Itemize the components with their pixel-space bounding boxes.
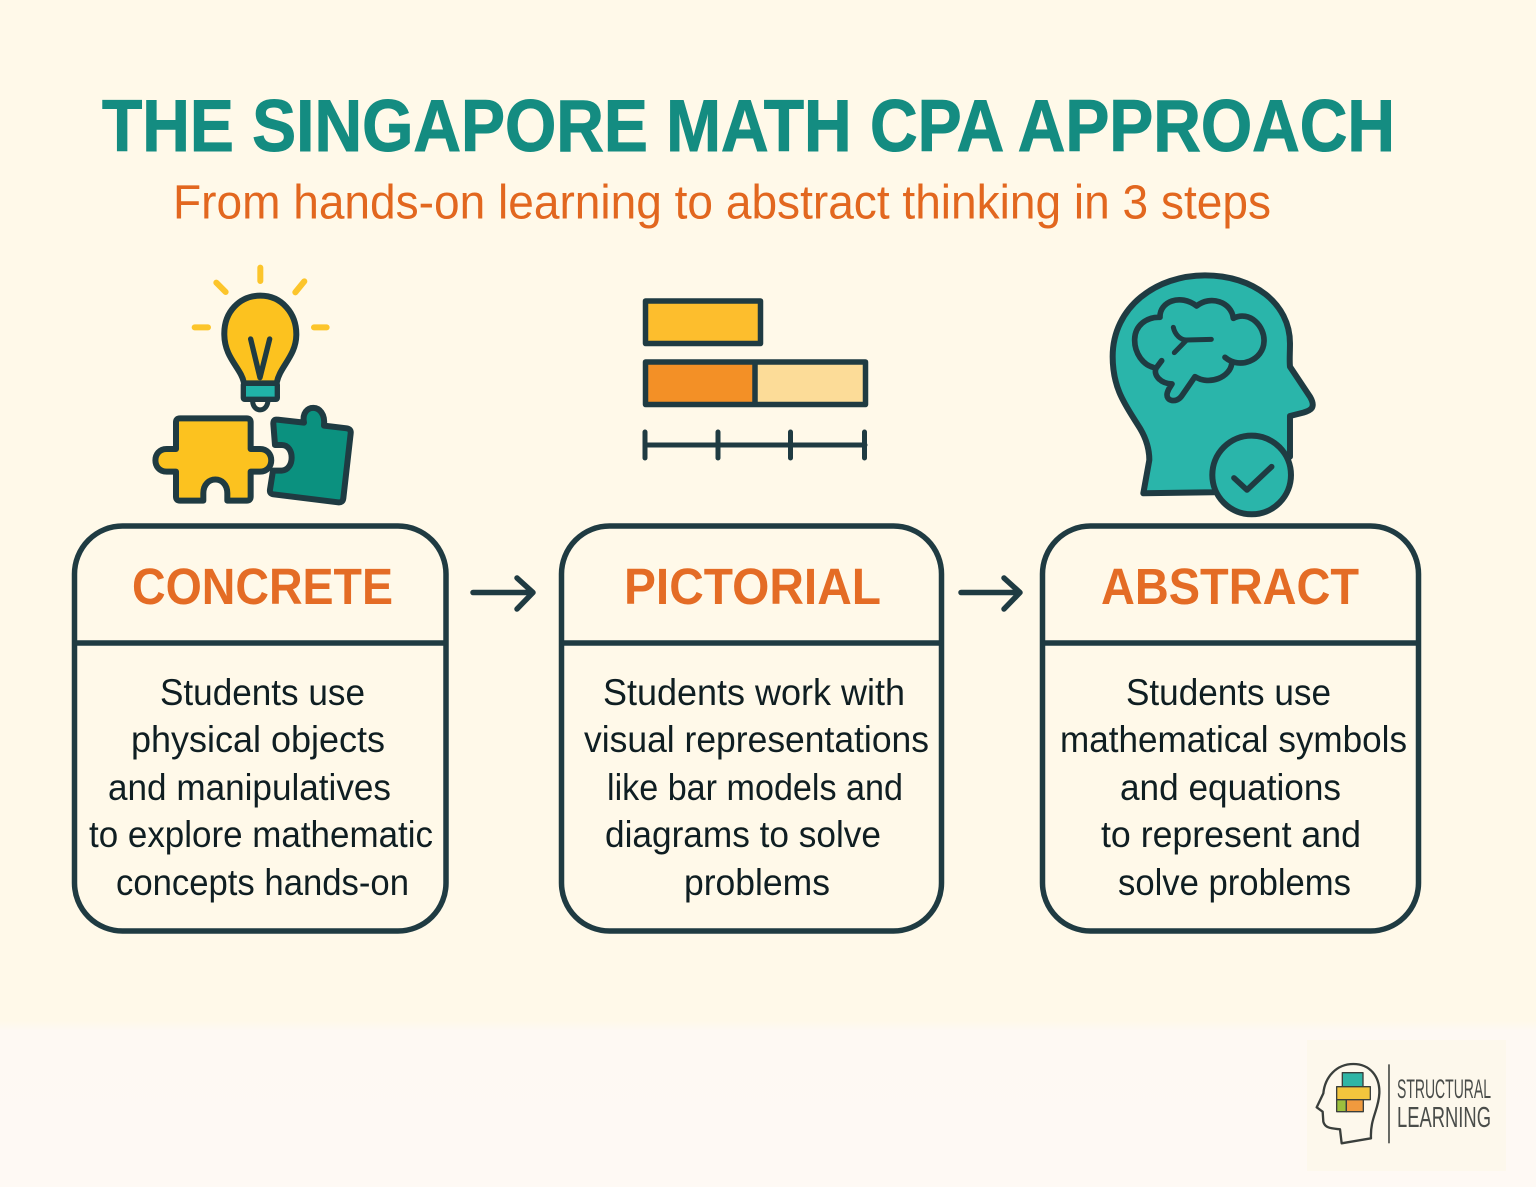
text: abstract description — [1060, 672, 1407, 903]
subtitle: From hands-on learning to abstract thinking in 3 steps — [173, 176, 1271, 230]
logo: structural learning — [1307, 1040, 1506, 1171]
text: abstract description: to represent and — [1101, 814, 1361, 855]
text: concrete description: physical objects — [131, 719, 385, 760]
text: pictorial description: like bar models and — [607, 767, 903, 808]
text: pictorial description — [584, 672, 929, 903]
text: abstract description: solve problems — [1118, 862, 1351, 903]
text: concrete description: Students use — [160, 672, 365, 713]
panel: abstract — [1042, 526, 1418, 931]
text: concrete description: to explore mathematic — [89, 814, 433, 855]
heading: pictorial: PICTORIAL — [624, 558, 881, 615]
heading: abstract: ABSTRACT — [1101, 558, 1359, 615]
text: pictorial description: Students work with — [603, 672, 905, 713]
panel: pictorial — [562, 526, 942, 931]
title: THE SINGAPORE MATH CPA APPROACH — [102, 86, 1395, 167]
arrow: concrete to pictorial — [473, 578, 533, 609]
icon: bar model and number line — [645, 301, 866, 458]
text: concrete description — [89, 672, 433, 903]
top bar — [646, 301, 760, 344]
arrow: pictorial to abstract — [961, 578, 1020, 609]
text: pictorial description: problems — [684, 862, 830, 903]
split bar — [646, 362, 866, 404]
text: abstract description: mathematical symbols — [1060, 719, 1407, 760]
text: pictorial description: diagrams to solve — [605, 814, 881, 855]
panel: concrete — [74, 526, 446, 931]
number line — [645, 432, 865, 458]
text: pictorial description: visual representations — [584, 719, 929, 760]
logo icon: head with blocks — [1317, 1064, 1389, 1143]
icon: light bulb and puzzle pieces — [155, 268, 351, 502]
icon: head with brain and check mark — [1113, 275, 1313, 514]
text: concrete description: concepts hands-on — [116, 862, 409, 903]
text: abstract description: Students use — [1126, 672, 1331, 713]
text: abstract description: and equations — [1120, 767, 1341, 808]
heading: concrete: CONCRETE — [132, 558, 393, 615]
text: concrete description: and manipulatives — [108, 767, 391, 808]
